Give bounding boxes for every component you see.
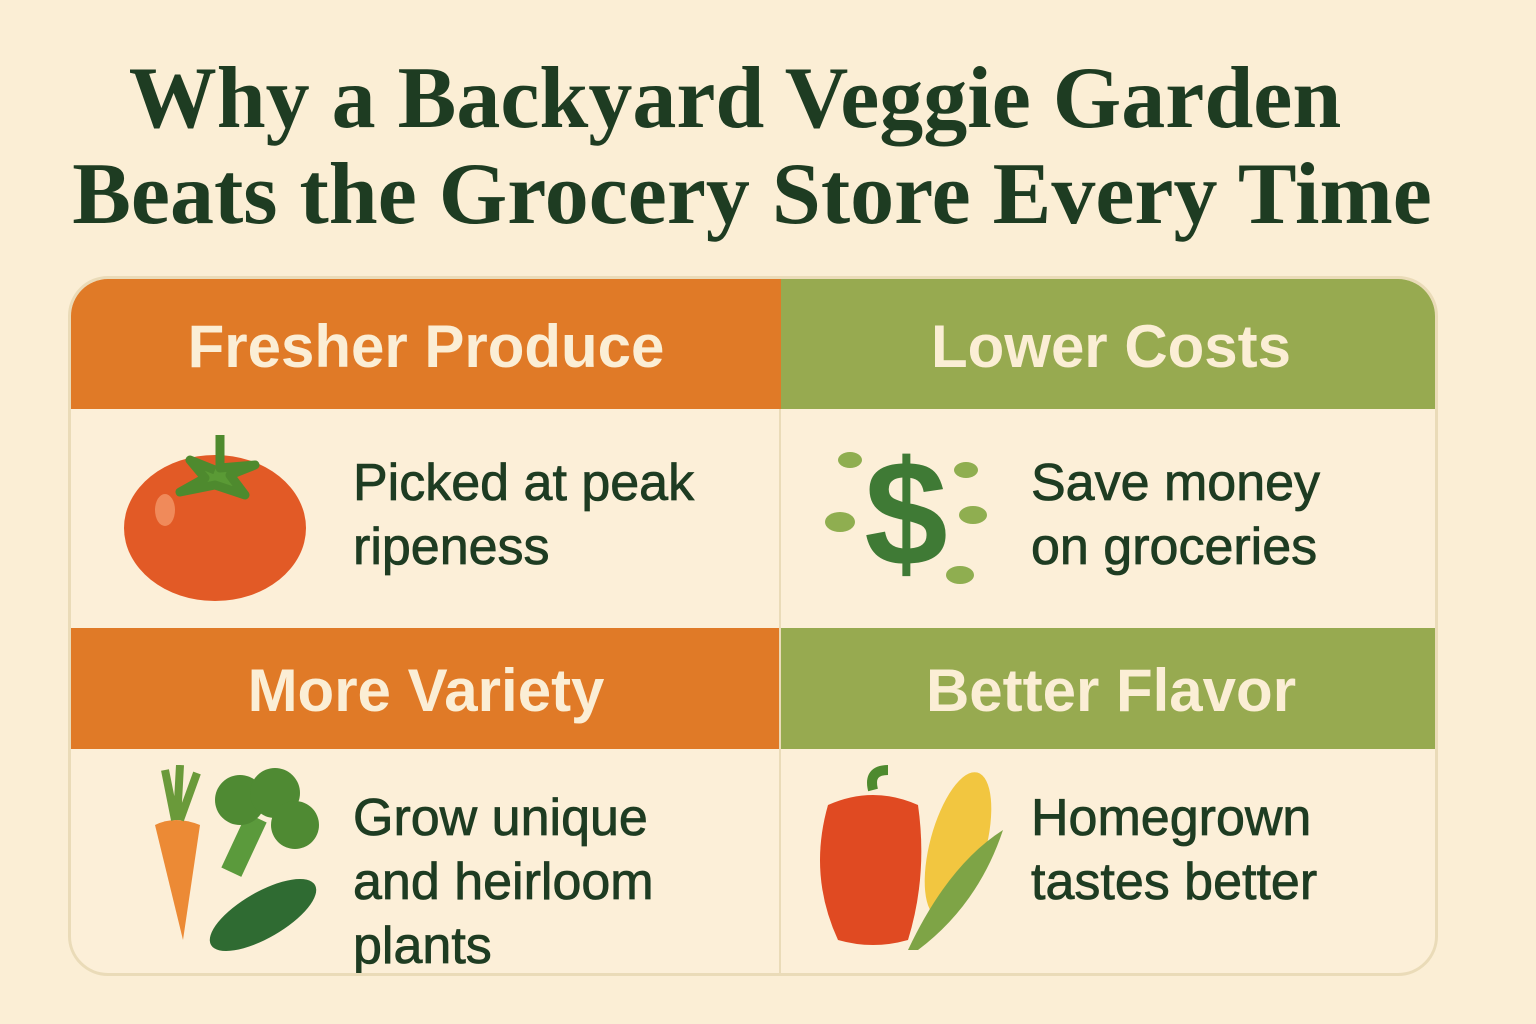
header: better flavor: Better Flavor [926, 657, 1296, 724]
header: more variety [71, 628, 781, 749]
text: save money: Save money [1031, 454, 1320, 512]
title: Beats the Grocery Store Every Time [72, 146, 1432, 243]
text: homegrown: Homegrown [1031, 789, 1311, 847]
icon: tomato [124, 435, 306, 601]
title [72, 50, 1432, 243]
header: fresher produce: Fresher Produce [188, 313, 664, 380]
text: homegrown [1031, 789, 1317, 911]
icon: pepper and corn [820, 765, 1003, 950]
title: Why a Backyard Veggie Garden [129, 50, 1341, 147]
icon: carrot broccoli cucumber [155, 765, 319, 951]
text: grow unique: plants [353, 917, 492, 975]
text: save money [1031, 454, 1320, 576]
header: lower costs [781, 279, 1441, 409]
header: fresher produce [71, 279, 781, 409]
icon: dollar with leaves: $ [864, 430, 948, 597]
header: lower costs: Lower Costs [931, 313, 1291, 380]
header: more variety: More Variety [248, 657, 604, 724]
header: better flavor [781, 628, 1441, 749]
text: save money: on groceries [1031, 518, 1317, 576]
icon: dollar with leaves [825, 430, 987, 597]
text: grow unique: and heirloom [353, 853, 654, 911]
text: picked at peak ripeness: ripeness [353, 518, 550, 576]
text: grow unique [353, 789, 654, 975]
panel: benefits grid [68, 276, 1438, 976]
text: homegrown: tastes better [1031, 853, 1317, 911]
text: grow unique: Grow unique [353, 789, 648, 847]
text: picked at peak ripeness [353, 454, 695, 576]
text: picked at peak ripeness: Picked at peak [353, 454, 694, 512]
